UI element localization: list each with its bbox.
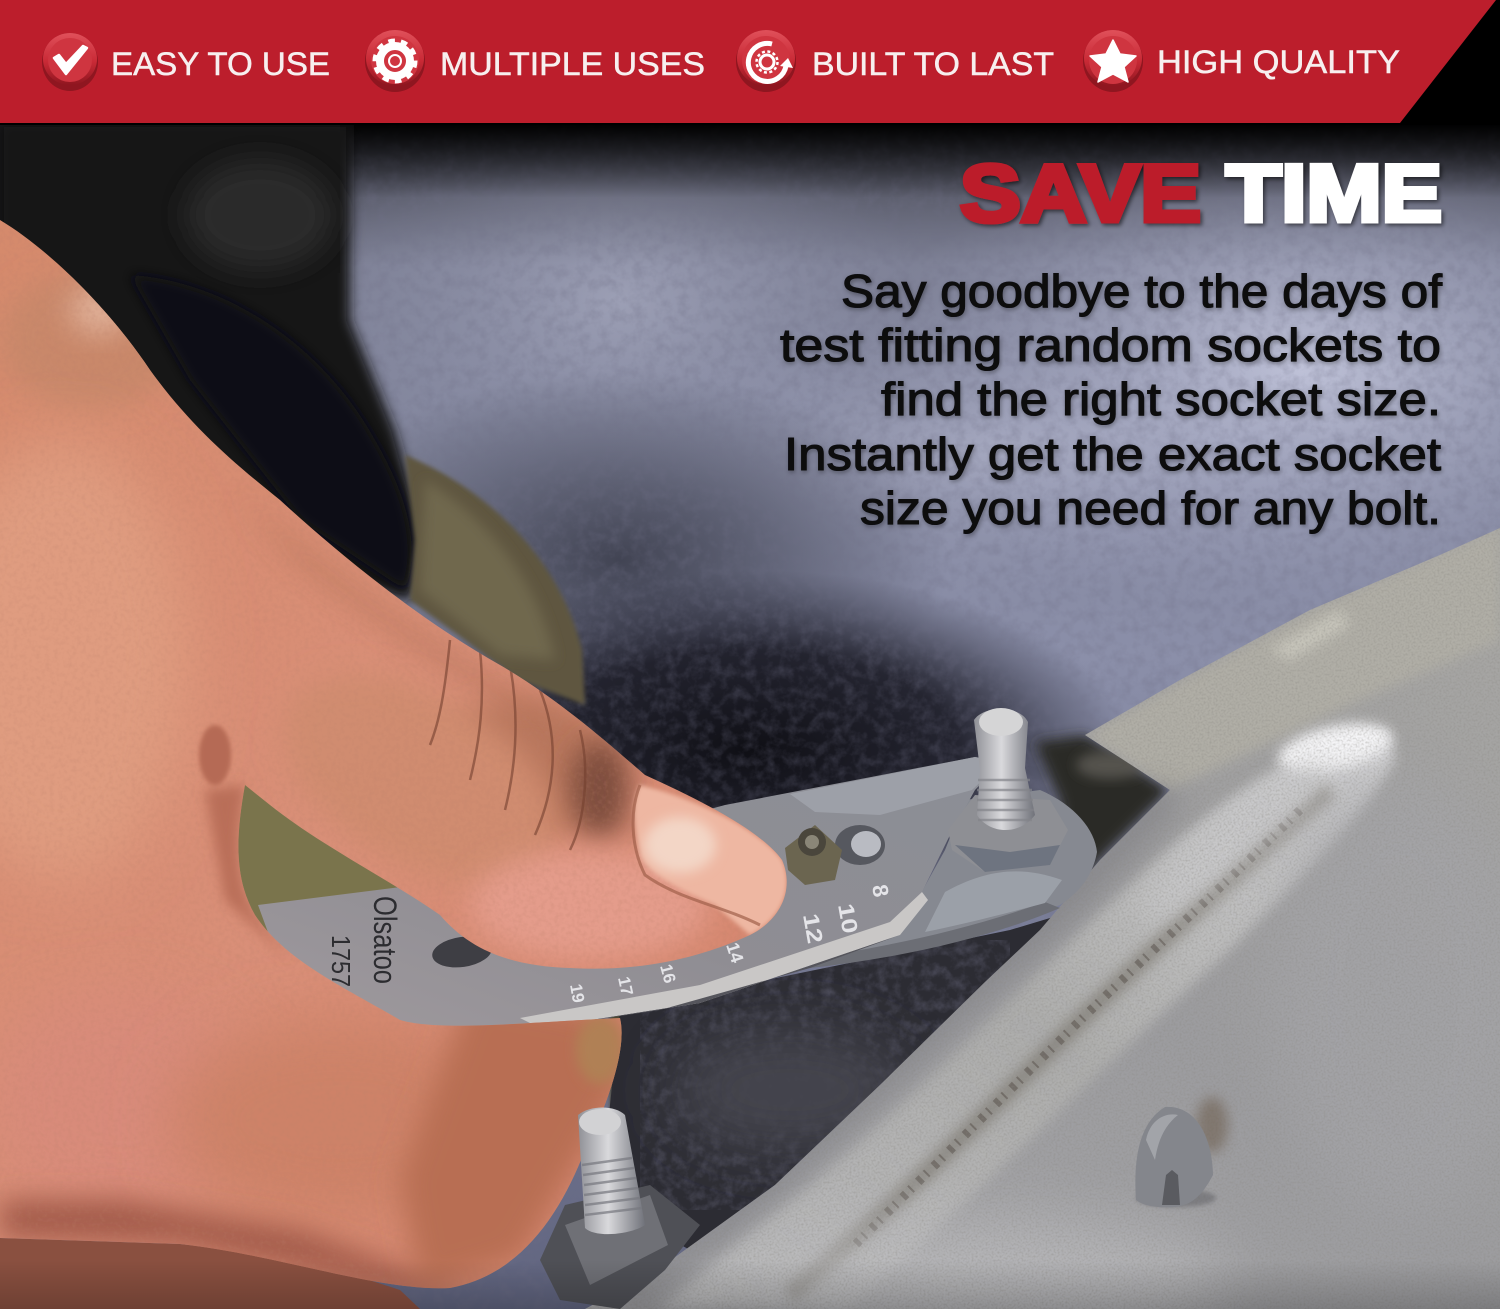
tool size markings: 8 [867,883,894,899]
tool engraved text: 1757 [326,935,356,987]
title: save time: TIME [1226,149,1442,239]
body text block: find the right socket size. [881,373,1441,425]
tool: main plate [258,757,1002,1036]
tool engraved text: Olsatoo [367,896,403,984]
tool size markings [566,883,894,1004]
body text block: test fitting random sockets to [780,319,1441,371]
icon: plastic push pin on panel [1135,1107,1216,1207]
body text block: size you need for any bolt. [860,482,1441,534]
bottom vignette [0,1260,1500,1309]
body text block [780,265,1442,534]
badge item: easy to use [42,33,330,91]
title: save time: SAVE [960,149,1201,239]
header banner [0,0,1500,125]
dark tire and shadows upper left [0,123,425,600]
badge item: multiple uses [365,30,705,92]
tool size markings: 16 [656,962,679,985]
badge item: high quality [1083,30,1400,92]
badge item: built to last [736,30,1054,92]
tool size markings: 14 [722,940,747,965]
badge item: multiple uses: MULTIPLE USES [440,46,705,82]
body text block: Say goodbye to the days of [841,265,1442,317]
body text block: Instantly get the exact socket [784,428,1441,480]
beige wheel behind hand [225,455,672,1110]
tool engraved text [326,896,403,987]
dark engine parts under tool [600,735,1170,1250]
title: save time [960,149,1442,239]
tool size markings: 12 [798,912,828,945]
lower stud bolt [540,1108,700,1309]
tool size markings: 17 [614,975,637,997]
badge item: built to last: BUILT TO LAST [812,46,1054,82]
tool size markings: 19 [566,982,588,1004]
tool size markings: 10 [833,902,863,935]
silver car panel [585,528,1500,1309]
badge item: high quality: HIGH QUALITY [1157,44,1400,80]
badge item: easy to use: EASY TO USE [111,46,330,82]
upper stud bolt with nut [948,708,1068,872]
hand [0,220,800,1309]
tool: rear lever [810,790,1097,968]
